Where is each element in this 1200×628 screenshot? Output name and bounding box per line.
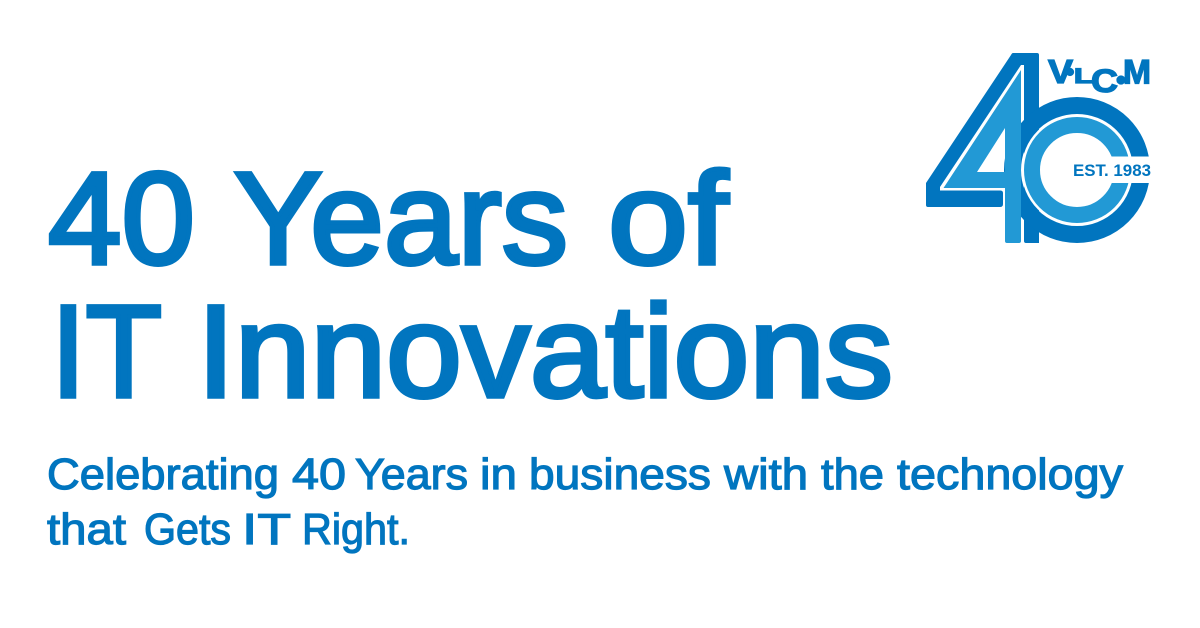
- subtitle: technology: [897, 450, 1123, 499]
- title: 40: [48, 144, 195, 292]
- title: Years: [234, 144, 568, 292]
- subtitle: that: [47, 505, 126, 554]
- icon: light blue 4: [944, 70, 1021, 243]
- icon: dark blue C arc: [1012, 106, 1142, 234]
- subtitle: Gets: [144, 505, 231, 554]
- subtitle: with: [723, 450, 808, 499]
- subtitle: [47, 450, 1123, 554]
- logo text: VOLCOM: M: [1123, 54, 1151, 92]
- icon: dark blue 4 outline: [926, 53, 1039, 243]
- title: of: [608, 144, 729, 292]
- logo text: VOLCOM: C: [1091, 63, 1118, 99]
- subtitle: the: [821, 450, 884, 499]
- title: [48, 144, 893, 424]
- subtitle: 40: [292, 450, 346, 499]
- logo text: VOLCOM: L: [1074, 65, 1093, 88]
- icon: gap in C rings: [1100, 156, 1160, 183]
- title: IT: [51, 278, 162, 424]
- subtitle: business: [529, 450, 711, 499]
- icon: white gap ring: [1022, 114, 1132, 226]
- subtitle: Years: [355, 450, 468, 499]
- title: Innovations: [197, 278, 893, 424]
- subtitle: IT: [242, 505, 291, 554]
- subtitle: in: [480, 450, 517, 499]
- subtitle: Celebrating: [47, 450, 279, 499]
- logo text: VOLCOM: V: [1048, 53, 1073, 90]
- icon: light blue C ring: [1032, 125, 1122, 215]
- subtitle: Right.: [302, 505, 410, 554]
- logo text: VOLCOM: [1048, 53, 1151, 99]
- text: established date: EST. 1983: [1073, 162, 1151, 180]
- logo: Volcom 40 anniversary badge: [926, 53, 1160, 243]
